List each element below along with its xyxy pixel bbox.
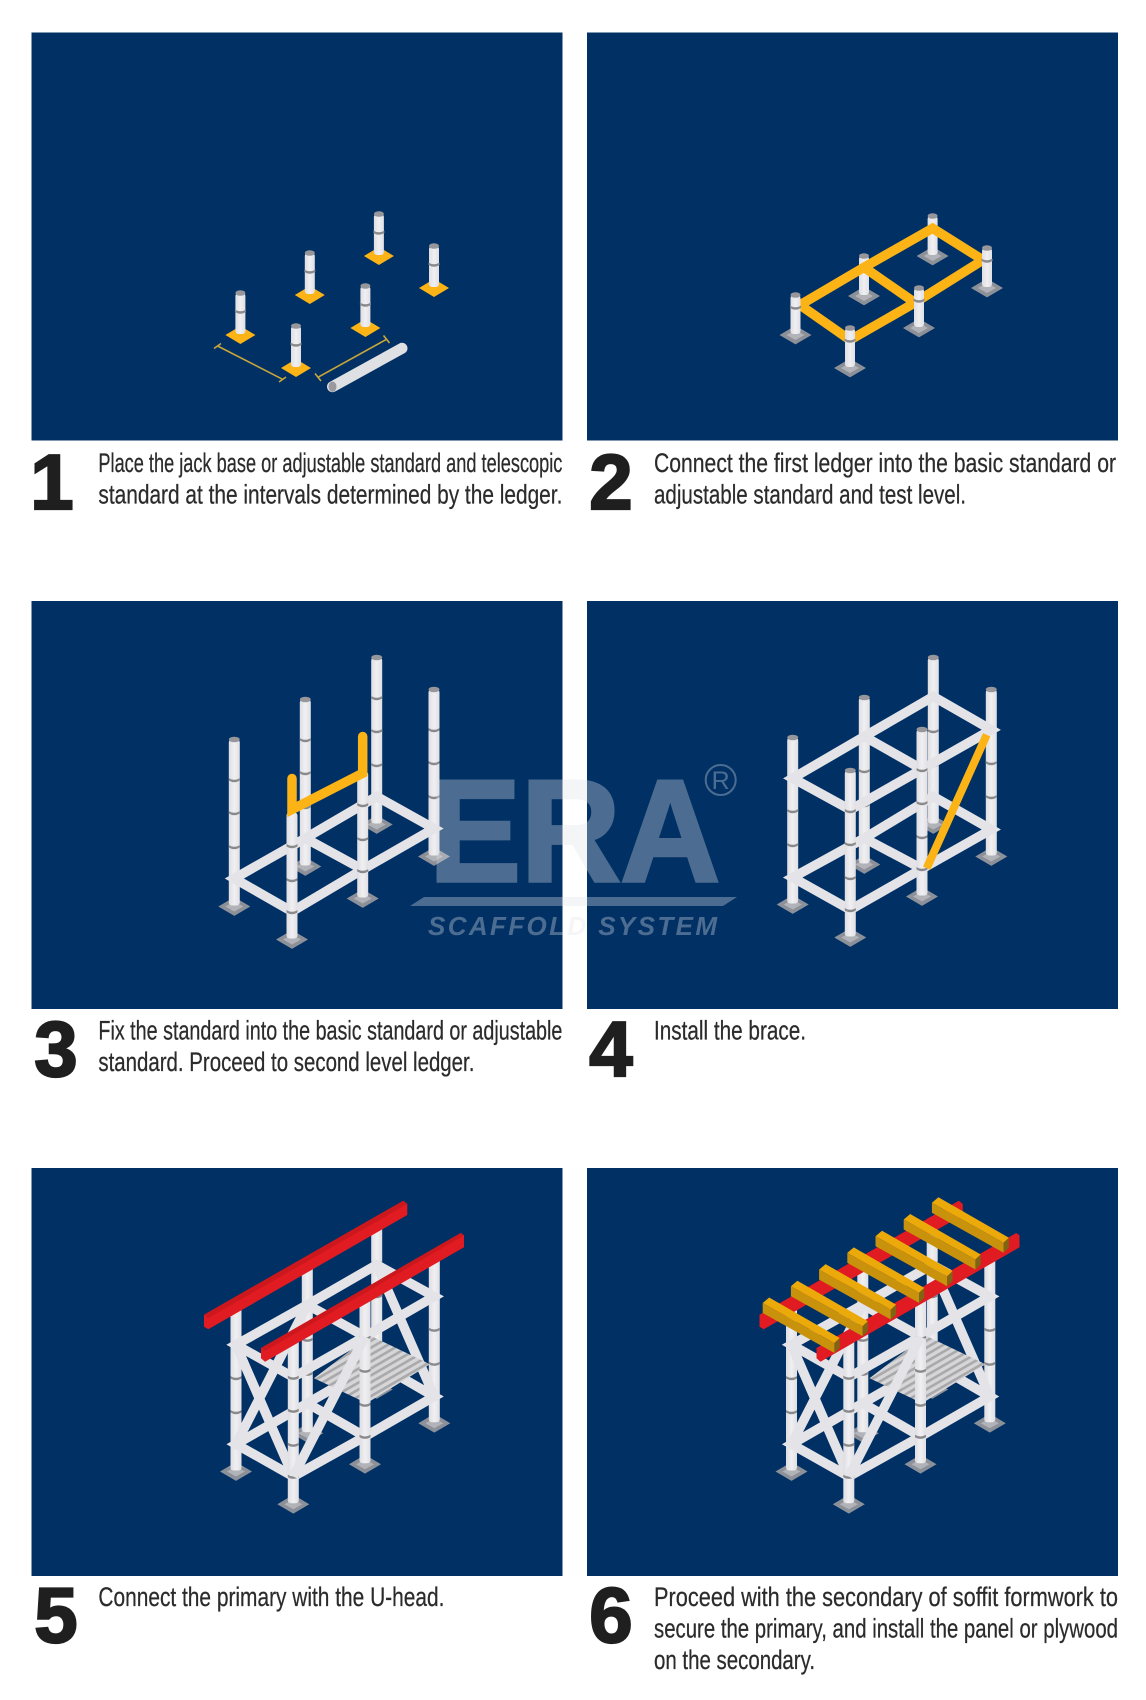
- panel: step 6: [587, 1168, 1118, 1576]
- watermark: ERA Scaffold System logo: R: [712, 767, 730, 795]
- step 5 number: 5: [34, 1571, 78, 1659]
- watermark: ERA Scaffold System logo: SCAFFOLD SYSTEM: [428, 911, 718, 941]
- panel: step 1: [32, 32, 562, 440]
- illustration: secondary beams across primaries: [760, 1197, 1020, 1514]
- illustration: first ledgers: [780, 213, 1003, 377]
- step 4 number: 4: [589, 1005, 633, 1093]
- panel: step 3: [32, 601, 562, 1009]
- illustration: standards and second level ledger: [218, 655, 450, 949]
- step 2 text: adjustable standard and test level.: [654, 480, 966, 510]
- step 5 text: Connect the primary with the U-head.: [98, 1582, 444, 1612]
- step 1 number: 1: [30, 438, 74, 526]
- step 6 text: on the secondary.: [654, 1645, 815, 1675]
- step 6 number: 6: [589, 1571, 633, 1659]
- step 3 text: standard. Proceed to second level ledger.: [98, 1047, 474, 1077]
- illustration: brace installed: [777, 655, 1007, 947]
- panel: step 4: [587, 601, 1118, 1009]
- step 3 text: Fix the standard into the basic standard or adjustable: [98, 1016, 562, 1046]
- illustration: primary beams on U-heads: [204, 1201, 464, 1514]
- step 1 text: Place the jack base or adjustable standard and telescopic: [98, 448, 562, 478]
- watermark: ERA Scaffold System logo: ERA: [429, 750, 720, 912]
- step 1 text: standard at the intervals determined by the ledger.: [98, 480, 562, 510]
- panel: step 5: [32, 1168, 562, 1576]
- step 4 text: Install the brace.: [654, 1016, 806, 1046]
- illustration: jack bases and standards: [214, 211, 449, 392]
- step 3 number: 3: [34, 1005, 78, 1093]
- panel: step 2: [587, 32, 1118, 440]
- step 2 number: 2: [589, 438, 633, 526]
